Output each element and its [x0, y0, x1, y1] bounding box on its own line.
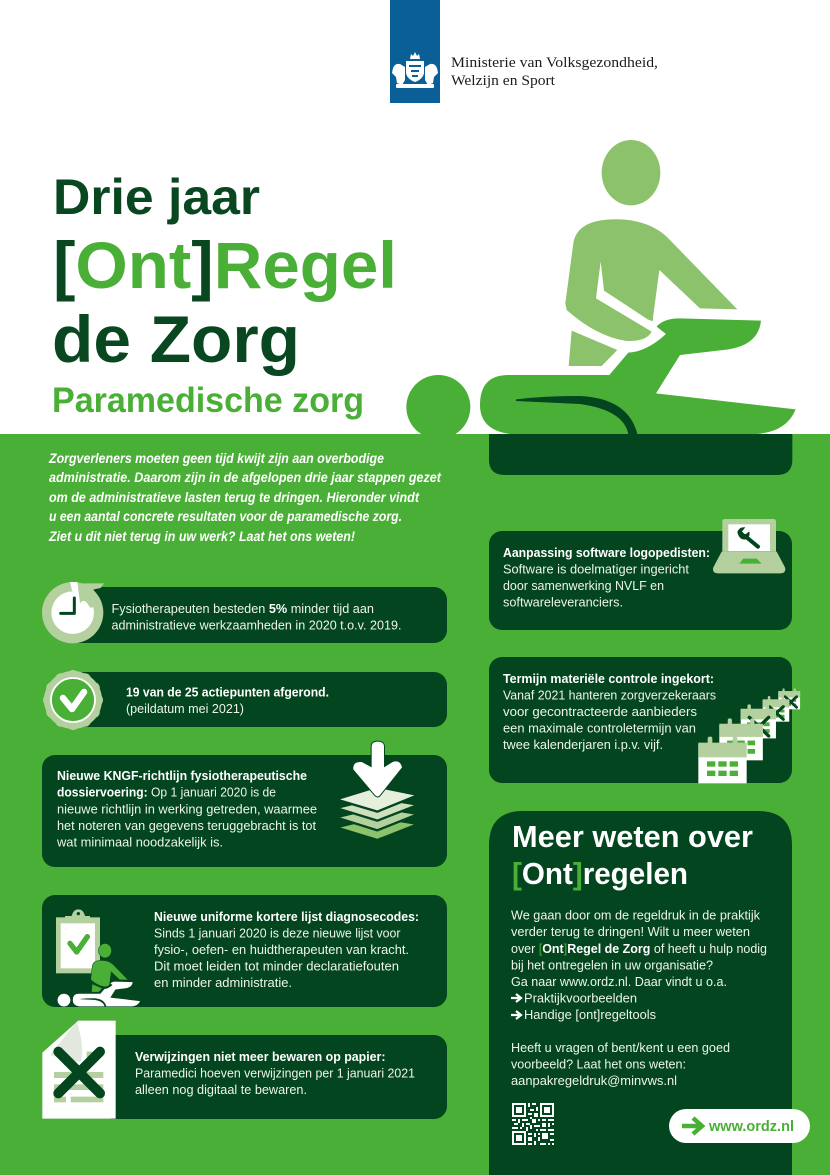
panel: materiele controle: twee kalenderjaren i.p.v. vijf. [503, 737, 663, 752]
panel: 5% minder tijd [42, 582, 447, 643]
icon: arrow onto stack of papers [336, 742, 418, 840]
patient [406, 318, 796, 439]
icon: laptop with wrench [713, 519, 785, 573]
icon: QR code [512, 1103, 554, 1145]
illustration: therapist and patient [403, 140, 796, 475]
intro text: u een aantal concrete resultaten voor de paramedische zorg. [49, 508, 402, 524]
button: www.ordz.nl [669, 1109, 810, 1143]
heading [512, 819, 753, 891]
panel: diagnosecodes: en minder administratie. [154, 975, 292, 990]
ministry name: Ministerie van Volksgezondheid, [451, 55, 658, 71]
icon: document with cross [42, 1021, 116, 1119]
body text: Praktijkvoorbeelden [524, 990, 637, 1006]
panel: verwijzingen: alleen nog digitaal te bewaren. [135, 1082, 307, 1097]
heading: [Ont]regelen [512, 856, 688, 891]
panel: materiele controle: voor gecontracteerde aanbieders [503, 704, 698, 719]
panel: diagnosecodes: Dit moet leiden tot minder declaratiefouten [154, 958, 399, 974]
panel: KNGF-richtlijn: wat minimaal noodzakelijk is. [56, 834, 223, 850]
title: Drie jaar [53, 169, 260, 225]
body text: bij het ontregelen in uw organisatie? [511, 958, 713, 972]
body text: voorbeeld? Laat het ons weten: [511, 1056, 686, 1072]
panel: software logopedisten: Software is doelmatiger ingericht [503, 562, 689, 576]
icon: clipboard with therapist [56, 909, 140, 1007]
panel: 5% minder tijd: administratieve werkzaamheden in 2020 t.o.v. 2019. [112, 618, 402, 632]
body text: aanpakregeldruk@minvws.nl [511, 1073, 677, 1088]
ministry name: Welzijn en Sport [451, 73, 555, 89]
ministry name [451, 55, 658, 89]
body text: We gaan door om de regeldruk in de praktijk [511, 908, 760, 922]
body text: over [Ont]Regel de Zorg of heeft u hulp nodig [511, 941, 767, 956]
body text: Heeft u vragen of bent/kent u een goed [511, 1040, 730, 1055]
panel: diagnosecodes: Sinds 1 januari 2020 is deze nieuwe lijst voor [154, 926, 401, 940]
title: Paramedische zorg [52, 381, 364, 420]
body text: verder terug te dringen! Wilt u meer weten [511, 924, 750, 939]
panel: meer weten [489, 811, 810, 1175]
panel: KNGF-richtlijn: nieuwe richtlijn in werking getreden, waarmee [57, 802, 317, 816]
intro text: Ziet u dit niet terug in uw werk? Laat het ons weten! [48, 528, 355, 544]
body text: Ga naar www.ordz.nl. Daar vindt u o.a. [511, 974, 727, 989]
panel: software logopedisten [489, 519, 792, 630]
panel: software logopedisten: softwareleveranciers. [503, 594, 623, 610]
panel: verwijzingen: Paramedici hoeven verwijzingen per 1 januari 2021 [135, 1066, 415, 1080]
panel: KNGF-richtlijn: het noteren van gegevens teruggebracht is tot [57, 818, 316, 833]
panel: diagnosecodes: fysio-, oefen- en huidtherapeuten van kracht. [154, 942, 409, 957]
icon: calendars [698, 688, 800, 783]
panel: diagnosecodes [42, 895, 447, 1007]
title: de Zorg [52, 302, 300, 376]
panel: actiepunten: (peildatum mei 2021) [126, 701, 244, 716]
body text [511, 908, 767, 1088]
green background [0, 434, 830, 1175]
title: [Ont]Regel [53, 228, 397, 302]
heading: Meer weten over [512, 819, 753, 854]
panel: actiepunten [43, 670, 447, 730]
text: Nieuwe uniforme kortere lijst diagnosecodes: [154, 909, 419, 924]
intro text: administratie. Daarom zijn in de afgelopen drie jaar stappen gezet [49, 469, 442, 485]
text: Termijn materiële controle ingekort: [503, 671, 714, 686]
icon: arrow [682, 1118, 702, 1134]
panel: software logopedisten: door samenwerking NVLF en [503, 578, 664, 593]
title [52, 169, 397, 420]
icon: badge with check [43, 670, 103, 730]
white page background [0, 0, 830, 434]
panel: verwijzingen [42, 1021, 447, 1119]
intro text: om de administratieve lasten terug te dringen. Hieronder vindt [49, 489, 420, 505]
logo: Rijksoverheid [390, 0, 440, 103]
panel: materiele controle: Vanaf 2021 hanteren zorgverzekeraars [503, 688, 716, 702]
intro text: Zorgverleners moeten geen tijd kwijt zijn aan overbodige [48, 450, 384, 466]
icon: crest [392, 52, 438, 88]
icon: clock [42, 582, 104, 643]
panel: materiele controle: een maximale controletermijn van [503, 720, 696, 736]
text: Aanpassing software logopedisten: [503, 545, 710, 560]
button: www.ordz.nl: www.ordz.nl [708, 1118, 794, 1135]
panel: KNGF-richtlijn [42, 742, 447, 867]
therapist [565, 140, 737, 366]
text: Verwijzingen niet meer bewaren op papier: [135, 1049, 386, 1064]
panel: materiele controle [489, 657, 800, 783]
text: Fysiotherapeuten besteden 5% minder tijd aan [112, 601, 374, 616]
text: Nieuwe KNGF-richtlijn fysiotherapeutische [57, 768, 307, 783]
intro text [48, 450, 442, 544]
text: 19 van de 25 actiepunten afgerond. [126, 684, 329, 700]
body text: Handige [ont]regeltools [524, 1007, 656, 1022]
table [489, 434, 792, 475]
panel: KNGF-richtlijn: dossiervoering: Op 1 januari 2020 is de [57, 784, 276, 800]
